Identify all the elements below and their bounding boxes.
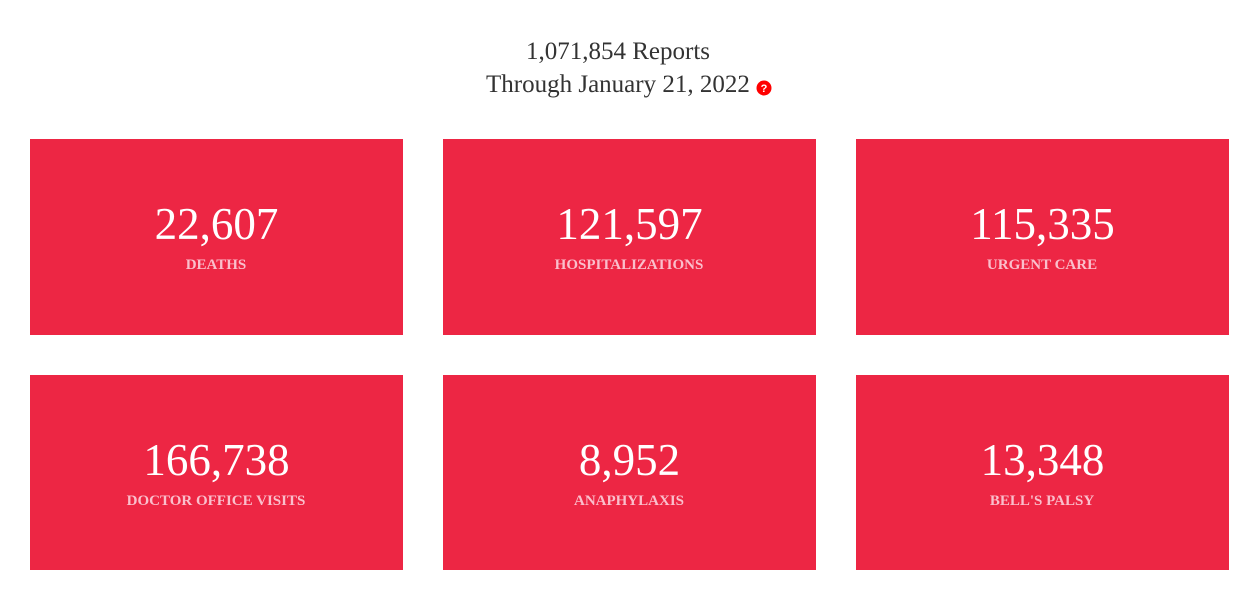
urgent care label: URGENT CARE [987,257,1097,273]
hospitalizations value: 121,597 [556,199,703,249]
anaphylaxis value: 8,952 [579,435,680,485]
panel: deaths [30,139,403,335]
panel: anaphylaxis [443,375,816,570]
deaths value: 22,607 [155,199,278,249]
panel: bell's palsy [856,375,1229,570]
urgent care value: 115,335 [970,199,1115,249]
panel: urgent care [856,139,1229,335]
deaths label: DEATHS [186,257,246,273]
date line: Through January 21, 2022 [486,71,750,98]
report count: 1,071,854 Reports [526,38,710,65]
title [486,38,772,98]
anaphylaxis label: ANAPHYLAXIS [574,493,684,509]
hospitalizations label: HOSPITALIZATIONS [555,257,703,273]
panel: doctor office visits [30,375,403,570]
icon: question mark [756,80,772,96]
panel: hospitalizations [443,139,816,335]
icon: question mark: ? [761,83,768,95]
doctor office visits label: DOCTOR OFFICE VISITS [127,493,305,509]
bell's palsy label: BELL'S PALSY [990,493,1094,509]
doctor office visits value: 166,738 [143,435,290,485]
bell's palsy value: 13,348 [981,435,1104,485]
